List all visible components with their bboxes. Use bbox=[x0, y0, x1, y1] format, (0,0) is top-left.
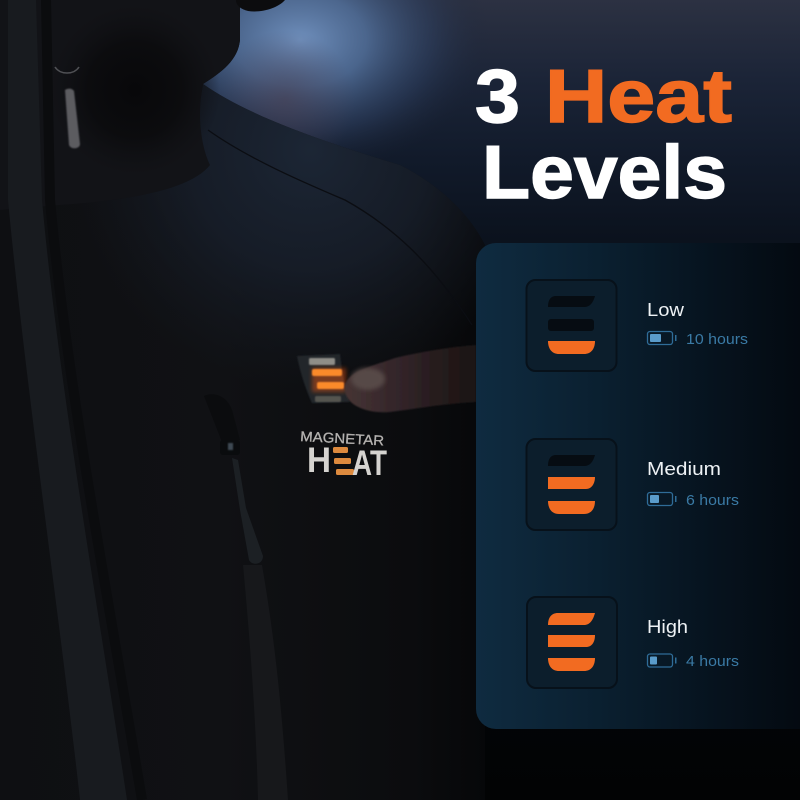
panel: heat levels bbox=[476, 243, 800, 729]
heat button on jacket bbox=[297, 354, 350, 403]
finger pressing button bbox=[345, 345, 476, 412]
icon: high heat tile bbox=[527, 597, 617, 688]
battery and runtime: 10 hours: 10 hours bbox=[686, 331, 748, 348]
logo: Magnetar Heat: AT bbox=[352, 444, 387, 483]
hood cord toggle bbox=[236, 0, 285, 11]
label: high: High bbox=[647, 617, 688, 637]
jacket centre zip placket bbox=[8, 0, 127, 800]
button: lit bars bbox=[312, 369, 344, 389]
jacket shoulder bbox=[60, 84, 485, 420]
battery and runtime: 4 hours bbox=[648, 653, 739, 670]
level: high bbox=[527, 597, 739, 688]
icon: low heat tile bbox=[526, 280, 616, 371]
title bbox=[475, 54, 732, 214]
shoulder seam bbox=[208, 130, 472, 325]
logo: Magnetar Heat bbox=[300, 428, 387, 483]
collar bbox=[0, 0, 240, 210]
title: Levels bbox=[482, 130, 727, 214]
battery and runtime: 6 hours bbox=[648, 492, 739, 509]
logo: Magnetar Heat: H bbox=[307, 441, 331, 480]
battery and runtime: 6 hours: 6 hours bbox=[686, 492, 739, 509]
button: glow bbox=[312, 368, 346, 392]
button: unlit top bar bbox=[309, 358, 335, 365]
logo: Magnetar Heat: MAGNETAR bbox=[300, 428, 385, 448]
title: Heat bbox=[545, 54, 732, 138]
label: low: Low bbox=[647, 300, 685, 320]
level: medium bbox=[526, 439, 739, 530]
pocket zip bbox=[204, 394, 288, 800]
battery and runtime: 4 hours: 4 hours bbox=[686, 653, 739, 670]
icon: medium heat tile bbox=[526, 439, 616, 530]
hood zip pull bbox=[55, 67, 80, 148]
title: 3 bbox=[475, 54, 520, 138]
photo: jacket bbox=[0, 0, 485, 800]
battery and runtime: 10 hours bbox=[648, 331, 748, 348]
level: low bbox=[526, 280, 748, 371]
label: medium: Medium bbox=[647, 459, 721, 479]
